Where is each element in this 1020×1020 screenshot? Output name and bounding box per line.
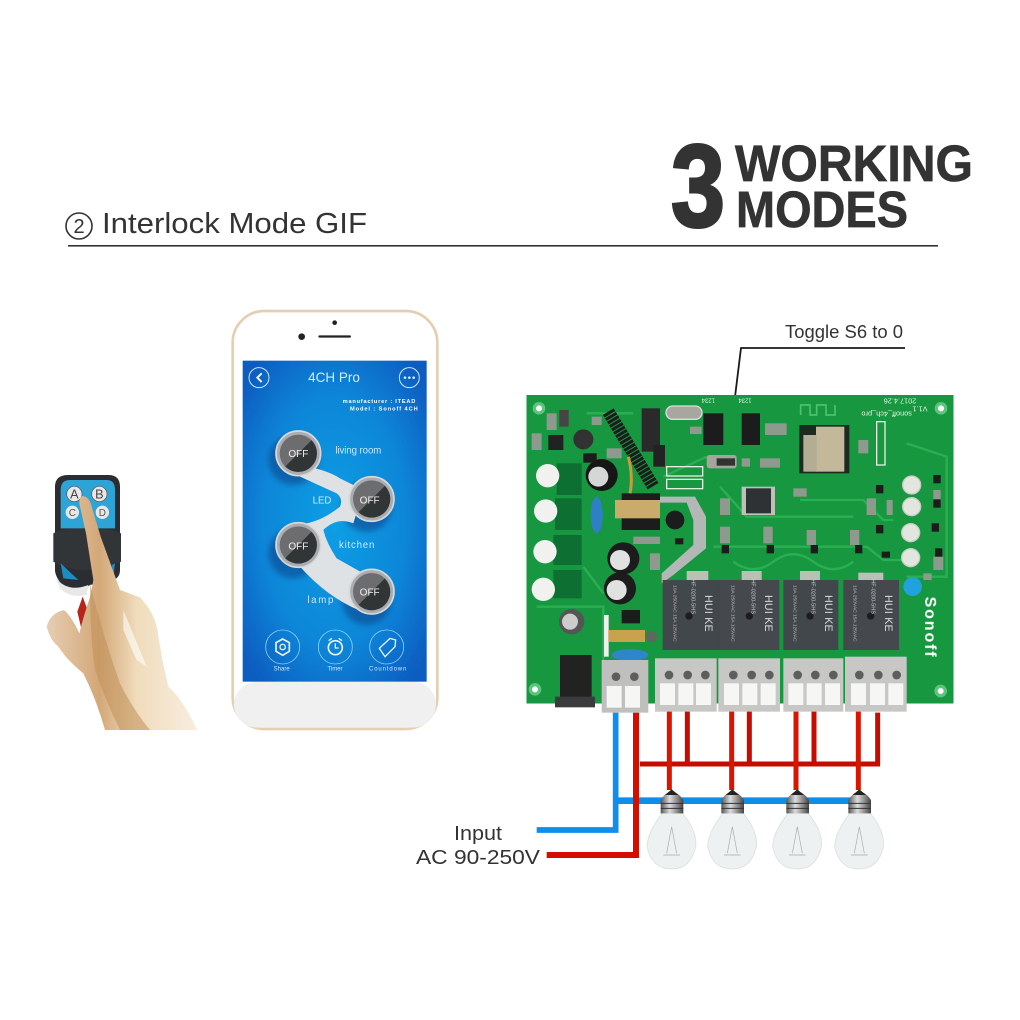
phone <box>233 311 437 729</box>
relay 3: 10A 250VAC 15A 125VAC <box>791 585 797 642</box>
dc jack <box>555 655 595 707</box>
header rule <box>68 245 938 247</box>
hand <box>47 496 197 730</box>
remote control <box>53 475 121 596</box>
phone screen: Timer <box>327 667 343 673</box>
relay 4: 10A 250VAC 15A 125VAC <box>851 585 857 642</box>
input label: AC 90-250V <box>416 847 541 869</box>
switch cluster: OFF <box>360 588 380 599</box>
bulb 2 <box>708 789 756 869</box>
device info: Model : Sonoff 4CH <box>350 407 418 413</box>
toggle switch S6 <box>707 455 737 468</box>
heading: interlock mode: 2 <box>73 216 85 238</box>
bulb 3 <box>773 789 821 869</box>
device info <box>343 399 418 413</box>
red wires <box>640 708 880 790</box>
input red line <box>547 713 636 855</box>
board text: sonoff_4ch_pro <box>861 410 912 419</box>
dip switches: 1234 <box>701 397 715 403</box>
relay 1: 10A 250VAC 15A 125VAC <box>671 585 677 642</box>
board text: V1.1 <box>912 405 928 414</box>
left terminals <box>532 464 559 601</box>
board text <box>861 397 928 419</box>
phone body <box>233 311 437 729</box>
relay 3 <box>783 579 838 650</box>
relay 1: HF-0200-5HS <box>690 579 696 614</box>
input label <box>416 823 541 869</box>
pcb <box>527 395 953 703</box>
relay 4 <box>843 579 899 650</box>
phone screen: Countdown <box>369 667 406 673</box>
switch labels <box>307 445 381 606</box>
power input parts <box>604 615 657 661</box>
relay 2 <box>720 579 779 650</box>
mounting holes <box>530 404 946 696</box>
mcu chip <box>742 487 775 515</box>
dip switches: 1234 <box>738 397 752 403</box>
callout: toggle S6 <box>727 322 905 462</box>
bottom actions <box>266 630 404 664</box>
phone chin <box>234 682 436 728</box>
terminal blocks <box>602 657 907 713</box>
sonoff logo: Sonoff <box>921 597 938 657</box>
heading: interlock mode: Interlock Mode GIF <box>102 208 367 240</box>
switch labels: LED <box>313 495 331 506</box>
capacitors <box>559 459 684 634</box>
title: 3 working modes: WORKING <box>735 135 973 192</box>
switch labels: living room <box>335 445 381 456</box>
circuit board <box>527 395 953 713</box>
remote control: B <box>95 488 104 502</box>
status leds <box>902 476 921 567</box>
antenna trace <box>801 405 835 415</box>
app bar: 4CH Pro <box>308 370 360 385</box>
transformer <box>591 457 660 533</box>
relay 4: HF-0200-5HS <box>870 579 876 614</box>
switch cluster: OFF <box>288 541 308 552</box>
switch labels: kitchen <box>339 540 374 551</box>
bulb 1 <box>647 789 696 869</box>
switch cluster: OFF <box>288 449 308 460</box>
callout: toggle S6: Toggle S6 to 0 <box>785 322 903 342</box>
board text: 2017.4.26 <box>884 397 916 406</box>
antenna coil and ic <box>548 406 702 487</box>
title: 3 working modes: 3 <box>671 120 725 251</box>
esp wifi module <box>799 425 849 473</box>
smd components <box>532 413 943 580</box>
icon: hand pressing remote <box>47 475 197 730</box>
relay 1 <box>663 579 720 650</box>
circuit wiring and bulbs <box>537 708 883 869</box>
phone screen: Share <box>274 667 290 673</box>
relay 2: HF-0200-5HS <box>750 579 756 614</box>
transistors <box>583 453 942 623</box>
input label: Input <box>454 823 502 845</box>
title: 3 working modes <box>671 120 973 251</box>
remote control: C <box>69 508 76 519</box>
dip switches <box>701 397 760 445</box>
pcb traces <box>537 413 947 663</box>
phone camera and speaker <box>298 320 351 340</box>
app bar <box>249 368 419 388</box>
relay 2: HUI KE <box>762 595 774 632</box>
title: 3 working modes: MODES <box>736 181 908 238</box>
switch labels: lamp <box>307 595 333 606</box>
input blue line <box>537 713 616 830</box>
relay 1: HUI KE <box>702 595 714 632</box>
blue indicator dot <box>903 577 922 596</box>
switch cluster <box>268 431 394 625</box>
bulb 4 <box>835 789 883 869</box>
relay 3: HUI KE <box>822 595 834 632</box>
phone screen <box>243 361 427 682</box>
headers <box>667 422 885 489</box>
grey heat trace <box>660 497 706 583</box>
left connectors <box>553 463 582 598</box>
device info: manufacturer : ITEAD <box>343 399 415 405</box>
relay 3: HF-0200-5HS <box>810 579 816 614</box>
switch cluster: OFF <box>360 495 380 506</box>
relay tabs <box>687 571 883 581</box>
relay 2: 10A 250VAC 15A 125VAC <box>730 585 736 642</box>
remote control: A <box>70 488 79 502</box>
relay 4: HUI KE <box>882 595 894 632</box>
remote control: D <box>99 508 106 519</box>
neutral bus <box>617 791 852 811</box>
